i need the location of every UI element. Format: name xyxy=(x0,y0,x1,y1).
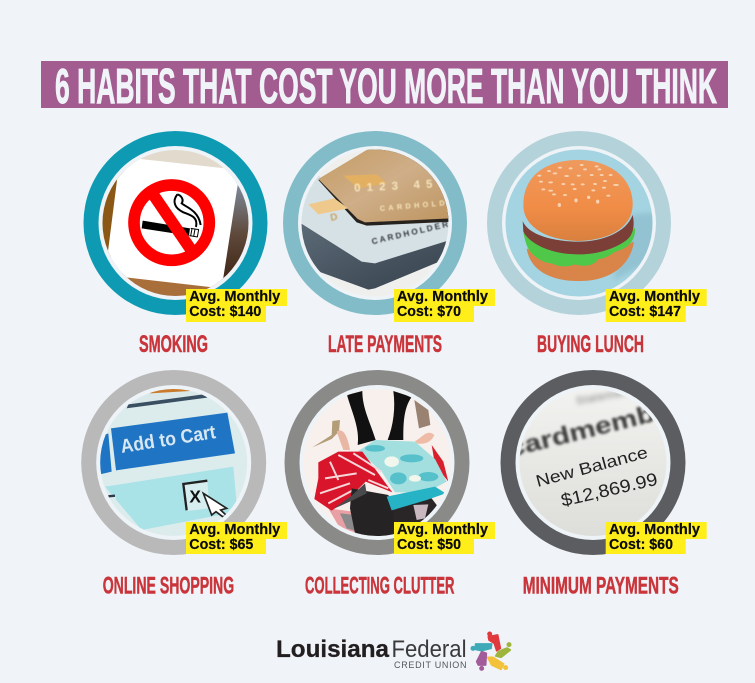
cost label: Avg. Monthly xyxy=(397,522,488,538)
photo: credit cards: CARDHOLDER xyxy=(371,219,449,246)
logo: Louisiana Federal Credit Union xyxy=(276,632,511,670)
cost label xyxy=(606,289,707,322)
photo: no smoking sign xyxy=(102,150,248,296)
cost label: Avg. Monthly xyxy=(609,522,700,538)
logo: Louisiana Federal Credit Union: Louisiana xyxy=(276,636,389,663)
photo: credit cards: D xyxy=(329,212,339,224)
photo: credit cards: CARDHOLD xyxy=(379,198,445,213)
cost label xyxy=(186,522,287,554)
cost label: Avg. Monthly xyxy=(189,289,280,305)
cost label: Cost: $147 xyxy=(609,304,681,320)
cost label xyxy=(394,522,495,554)
cost label: Cost: $65 xyxy=(189,537,253,553)
panel: buying lunch xyxy=(487,131,707,358)
photo: add to cart button: X xyxy=(189,486,201,506)
photo: statement balance: cardmemb xyxy=(506,400,658,463)
photo: burger xyxy=(506,150,652,296)
button text: Add to Cart xyxy=(119,422,218,458)
cost label: Cost: $50 xyxy=(397,537,461,553)
habit name: SMOKING xyxy=(139,331,208,358)
photo: credit cards xyxy=(302,150,448,296)
balance label: New Balance xyxy=(534,443,650,491)
balance amount: $12,869.99 xyxy=(559,469,659,511)
photo: pile of clothes xyxy=(304,389,450,536)
title banner xyxy=(41,60,728,114)
cost label: Avg. Monthly xyxy=(609,289,700,305)
panel: late payments xyxy=(283,131,495,358)
blurred statement heading: Statement xyxy=(575,385,634,407)
habit name: LATE PAYMENTS xyxy=(328,331,442,358)
habit name: BUYING LUNCH xyxy=(537,331,644,358)
logo: Louisiana Federal Credit Union: CREDIT UNION xyxy=(394,660,466,670)
habit name: COLLECTING CLUTTER xyxy=(305,572,455,600)
logo: Louisiana Federal Credit Union: Federal xyxy=(392,636,466,663)
panel: smoking xyxy=(84,131,287,358)
habit name: ONLINE SHOPPING xyxy=(103,572,234,600)
cost label xyxy=(606,522,707,554)
panel: online shopping xyxy=(81,370,287,600)
cost label xyxy=(186,289,287,322)
icon: five figures xyxy=(471,632,511,670)
cost label: Cost: $60 xyxy=(609,537,673,553)
photo: credit cards: 0123 45 xyxy=(354,179,433,195)
cost label: Cost: $70 xyxy=(397,304,461,320)
panel: collecting clutter xyxy=(284,370,495,600)
cost label: Avg. Monthly xyxy=(189,522,280,538)
cost label: Cost: $140 xyxy=(189,304,261,320)
panel: minimum payments xyxy=(500,370,707,600)
cost label xyxy=(394,289,495,322)
photo: statement balance xyxy=(520,390,666,536)
photo: add to cart button xyxy=(100,389,247,536)
cost label: Avg. Monthly xyxy=(397,289,488,305)
